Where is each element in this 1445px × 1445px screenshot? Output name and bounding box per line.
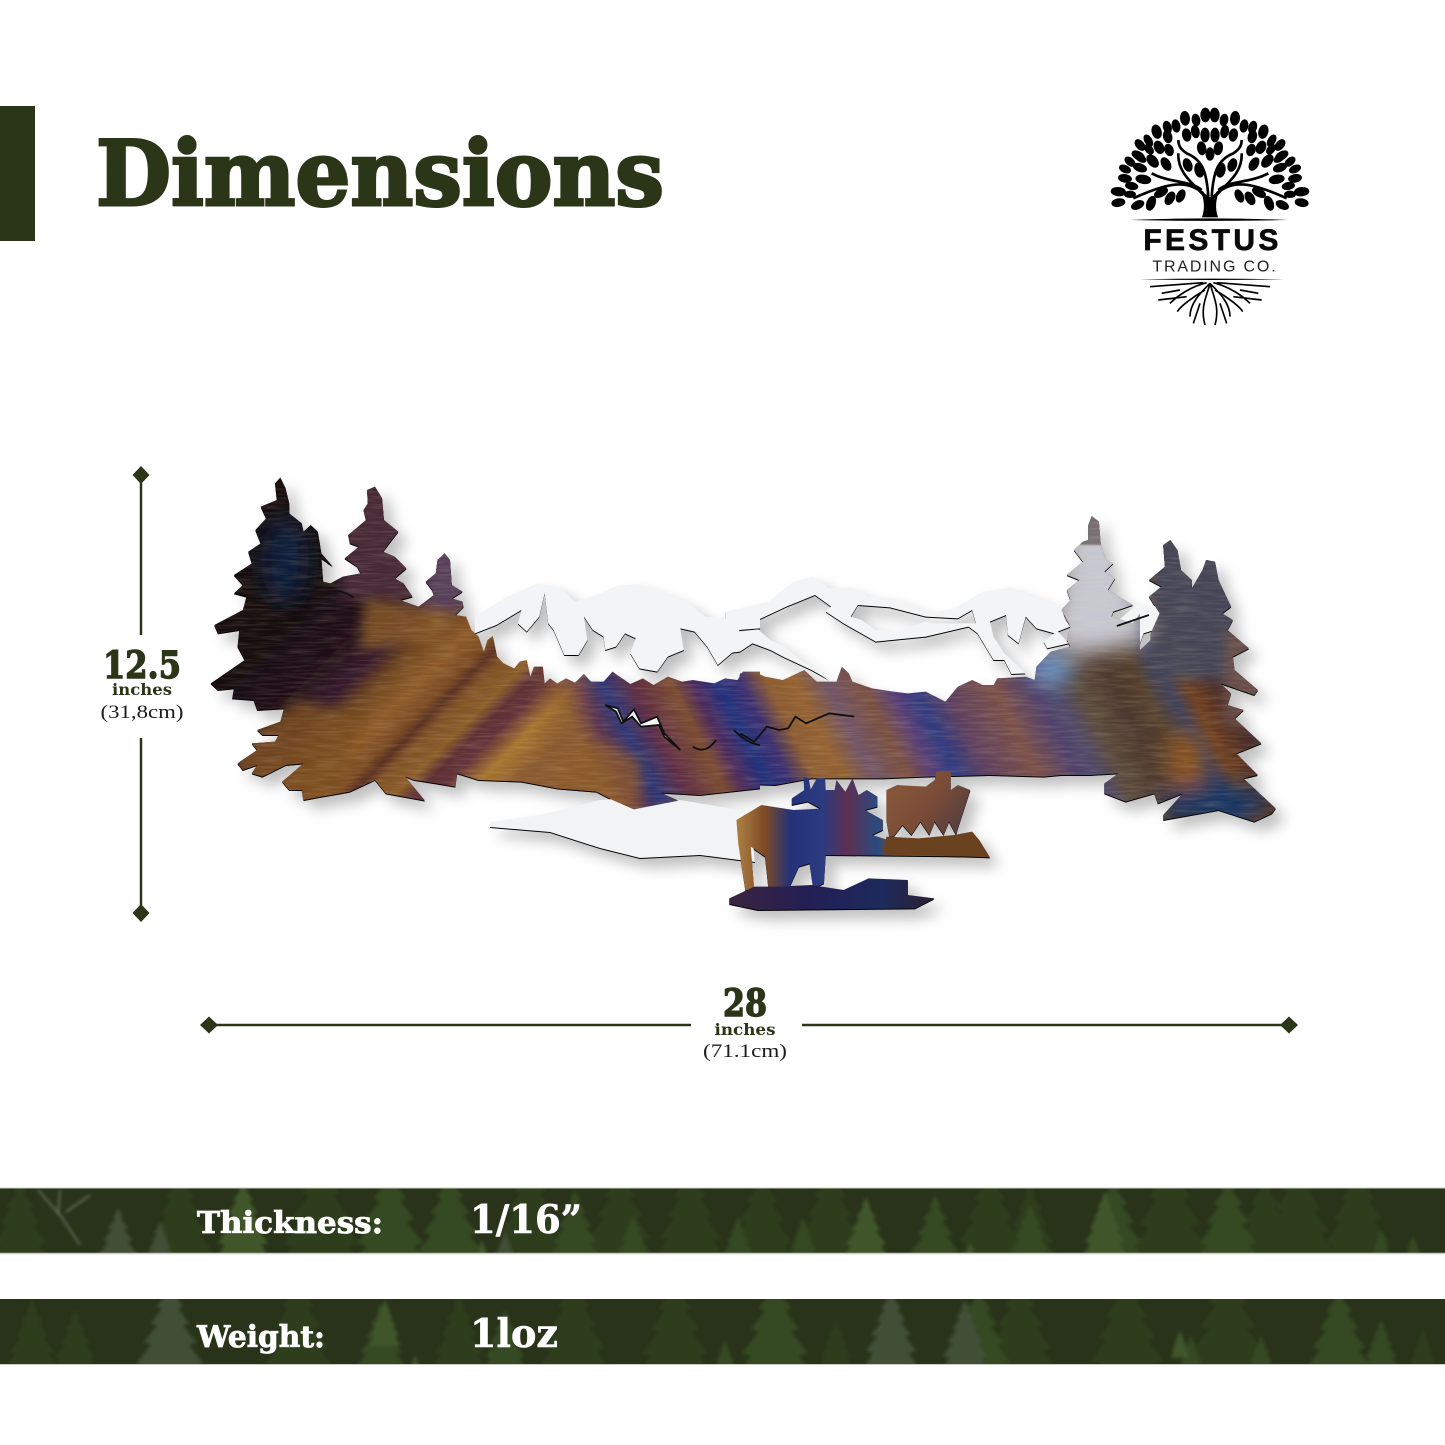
width dimension [200, 981, 1298, 1062]
width value: 28 [723, 981, 767, 1025]
weight value: 1loz [470, 1311, 558, 1357]
lake [490, 797, 755, 862]
forest texture [0, 1299, 1445, 1364]
artwork: metal mountain scene [210, 477, 1288, 928]
width unit: inches [714, 1020, 776, 1039]
top and bottom diamonds [132, 466, 150, 922]
band edges [0, 1364, 1445, 1366]
logo: Festus Trading Co. [1111, 109, 1309, 325]
height line [140, 476, 142, 912]
thickness label: Thickness: [197, 1206, 383, 1241]
cut-out lines in ridge [334, 591, 1149, 750]
left and right diamonds [200, 1016, 1298, 1034]
logo tagline: TRADING CO. [1152, 259, 1276, 276]
title: Dimensions [96, 121, 664, 227]
height metric: (31,8cm) [100, 702, 184, 723]
icon: tree canopy [1111, 109, 1309, 325]
forest ridge with trees [210, 477, 1288, 860]
panel: thickness band [0, 1188, 1445, 1254]
grass base [729, 878, 935, 910]
panel: weight band [0, 1299, 1445, 1365]
rocky ledge [883, 832, 990, 857]
forest texture [0, 1188, 1445, 1253]
snow peaks [475, 577, 1161, 680]
width line [212, 1024, 1286, 1026]
height unit: inches [112, 680, 172, 699]
moose [736, 777, 990, 890]
elk [886, 772, 970, 837]
thickness value: 1/16” [470, 1197, 582, 1243]
logo wordmark: FESTUS [1143, 224, 1278, 257]
width metric: (71.1cm) [703, 1041, 787, 1062]
height value: 12.5 [103, 643, 181, 687]
heading accent bar [0, 106, 35, 241]
weight label: Weight: [196, 1320, 325, 1355]
height dimension [100, 466, 184, 922]
band edges [0, 1187, 1445, 1189]
moose and elk on shore [729, 772, 990, 910]
